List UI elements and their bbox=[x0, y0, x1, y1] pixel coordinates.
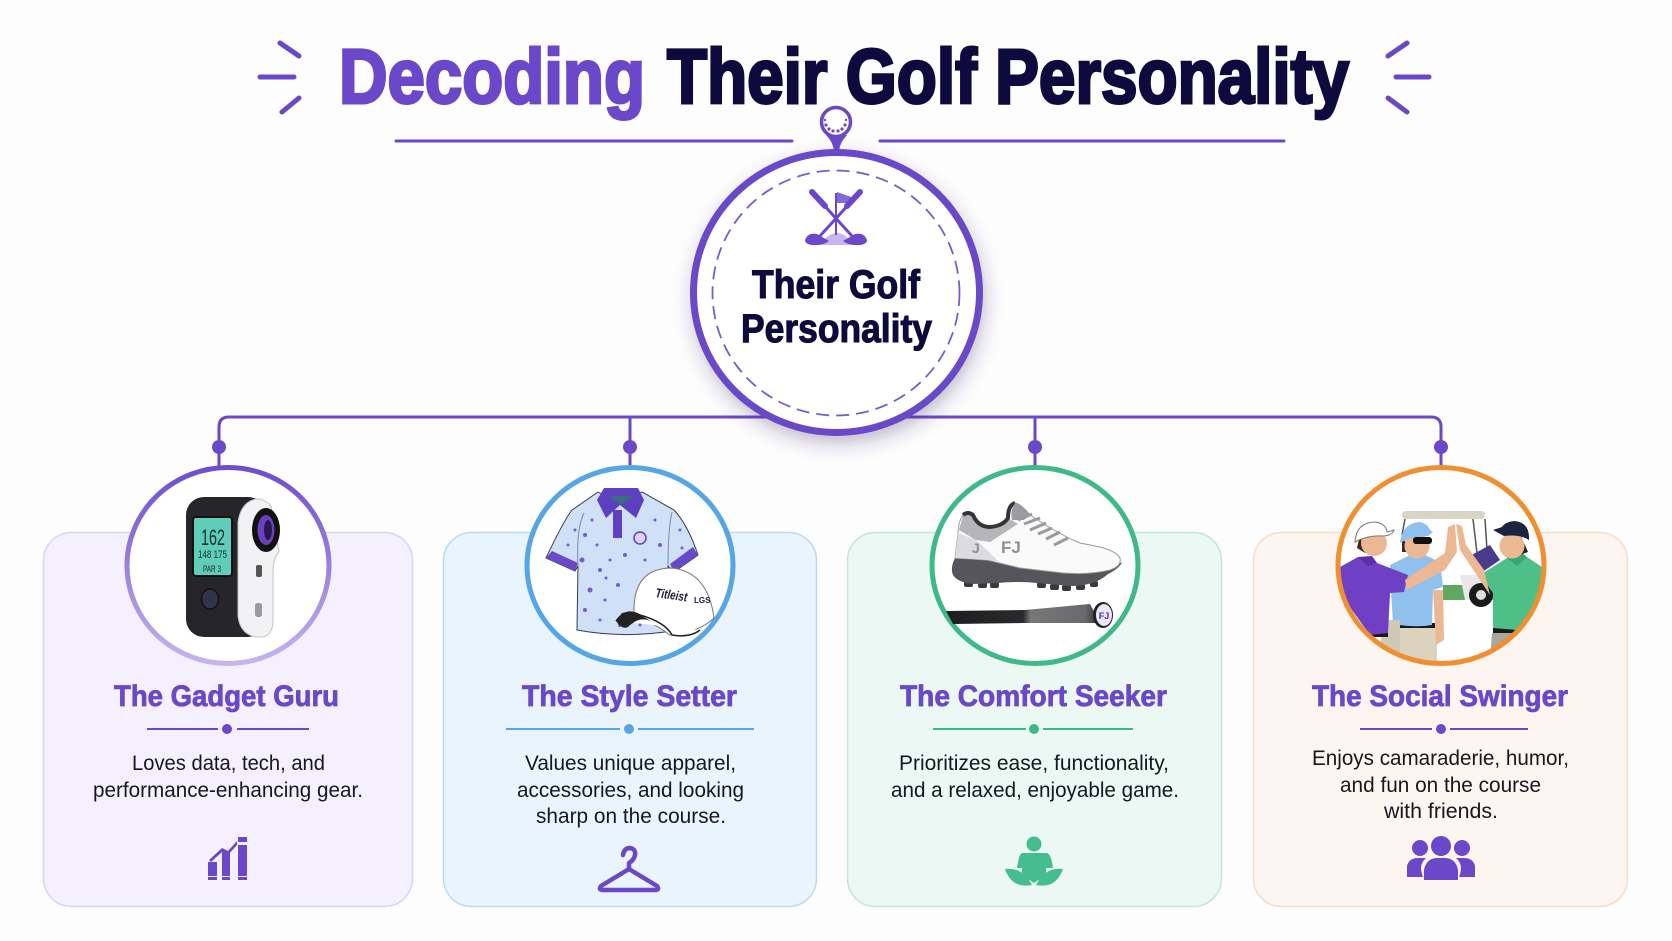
description: sharp on the course. bbox=[536, 805, 726, 828]
panel: The Gadget Guru bbox=[44, 468, 412, 906]
title: Decoding bbox=[339, 34, 645, 120]
card background bbox=[1254, 532, 1628, 906]
badge label bbox=[741, 263, 933, 351]
image: patterned polo and cap: Titleist bbox=[655, 585, 689, 604]
panel: The Comfort Seeker bbox=[848, 468, 1222, 906]
connector lines bbox=[212, 417, 1448, 466]
heading: The Gadget Guru bbox=[114, 680, 339, 713]
badge label: Their Golf bbox=[752, 263, 921, 307]
icon: group of people bbox=[1407, 836, 1475, 880]
description: Loves data, tech, and bbox=[132, 752, 325, 775]
divider bbox=[1360, 724, 1528, 734]
heading: The Style Setter bbox=[522, 680, 737, 713]
icon: right title rays bbox=[1388, 43, 1429, 112]
title: Their Golf Personality bbox=[667, 34, 1349, 120]
image: golf shoe and club grip: J bbox=[972, 540, 980, 556]
divider bbox=[506, 724, 754, 734]
description: and a relaxed, enjoyable game. bbox=[891, 779, 1179, 802]
card background bbox=[848, 532, 1222, 906]
heading: The Comfort Seeker bbox=[900, 680, 1167, 713]
image: golf rangefinder: PAR 3 bbox=[203, 564, 221, 574]
description bbox=[1312, 747, 1569, 823]
image: golf shoe and club grip bbox=[932, 468, 1138, 664]
image: golf rangefinder bbox=[127, 468, 329, 664]
image: golf shoe and club grip: FJ bbox=[1099, 611, 1109, 621]
icon: golf tee with ball bbox=[822, 108, 850, 151]
card background bbox=[444, 532, 816, 906]
description: with friends. bbox=[1383, 800, 1498, 823]
panel: The Social Swinger bbox=[1254, 466, 1628, 906]
description bbox=[891, 752, 1179, 802]
divider bbox=[933, 724, 1133, 734]
description: Enjoys camaraderie, humor, bbox=[1312, 747, 1569, 770]
card background bbox=[44, 532, 412, 906]
divider bbox=[147, 724, 309, 734]
icon: bar chart bbox=[208, 837, 247, 880]
panel: The Style Setter bbox=[444, 468, 816, 906]
icon: left title rays bbox=[260, 43, 299, 112]
image: three golfers high-fiving bbox=[1338, 466, 1548, 670]
title underline bbox=[396, 140, 1284, 142]
image: patterned polo and cap bbox=[527, 468, 733, 664]
icon: hanger bbox=[600, 848, 658, 890]
title bbox=[339, 34, 1349, 120]
badge ring bbox=[694, 152, 980, 432]
description: and fun on the course bbox=[1340, 774, 1541, 797]
description: performance-enhancing gear. bbox=[93, 779, 363, 802]
badge label: Personality bbox=[741, 307, 933, 351]
description: Values unique apparel, bbox=[525, 752, 736, 775]
description: Prioritizes ease, functionality, bbox=[899, 752, 1169, 775]
description: accessories, and looking bbox=[517, 779, 744, 802]
image: golf rangefinder: 148 175 bbox=[198, 549, 227, 561]
description bbox=[517, 752, 744, 828]
description bbox=[93, 752, 363, 802]
icon: crossed clubs and flag bbox=[805, 192, 867, 245]
central badge bbox=[694, 108, 980, 432]
badge dashed ring bbox=[712, 170, 960, 416]
image: golf rangefinder: 162 bbox=[201, 525, 225, 550]
heading: The Social Swinger bbox=[1312, 680, 1568, 713]
image: golf shoe and club grip: FJ bbox=[1001, 538, 1021, 557]
image: patterned polo and cap: LGS bbox=[694, 596, 711, 605]
icon: meditating person bbox=[1005, 836, 1063, 886]
